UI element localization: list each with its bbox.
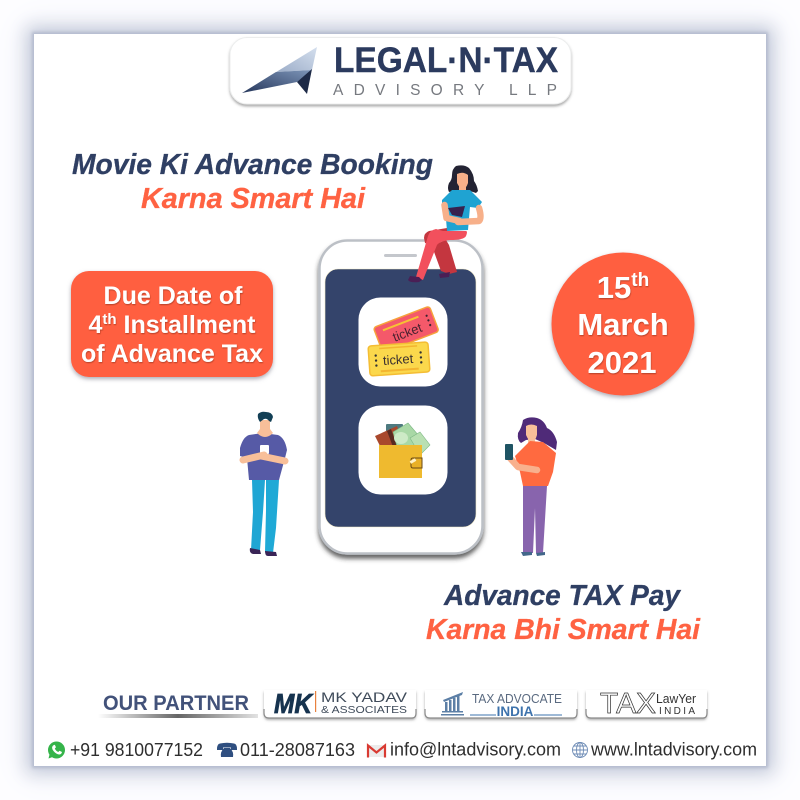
partner label: OUR PARTNER xyxy=(103,692,249,715)
heading: movie booking: Movie Ki Advance Booking xyxy=(72,149,433,181)
icon: globe xyxy=(572,742,588,758)
app card: wallet xyxy=(358,406,448,494)
icon: telephone xyxy=(217,743,237,757)
heading: movie booking: Karna Smart Hai xyxy=(141,183,366,215)
callout: due date: 4 xyxy=(88,311,102,339)
contact: website: www.lntadvisory.com xyxy=(590,740,757,760)
callout: date circle: 15 xyxy=(597,270,631,305)
logo subtitle: ADVISORY LLP xyxy=(333,82,557,99)
partner: MK Yadav xyxy=(264,688,416,719)
partner: Tax Advocate India: INDIA xyxy=(497,704,534,719)
partner: Tax Lawyer India: INDIA xyxy=(659,706,695,717)
icon: pillars xyxy=(441,692,464,716)
partner: Tax Lawyer India: LawYer xyxy=(656,691,697,706)
figure: seated woman on phone xyxy=(408,165,482,282)
partner: Tax Advocate India: TAX ADVOCATE xyxy=(472,691,562,706)
figure: standing man xyxy=(240,412,287,556)
partner: Tax Lawyer India: TAX xyxy=(600,688,656,720)
callout: due date: of Advance Tax xyxy=(81,340,263,368)
contact: telephone: 011-28087163 xyxy=(240,740,355,760)
callout: date circle: March xyxy=(577,307,669,342)
icon: paper plane logo mark xyxy=(242,47,317,94)
callout: date circle xyxy=(552,252,694,396)
partner: MK Yadav: MK YADAV xyxy=(321,690,407,705)
partner: MK Yadav: MK xyxy=(274,688,314,719)
contact: email: info@lntadvisory.com xyxy=(390,740,561,760)
heading: advance tax: Karna Bhi Smart Hai xyxy=(426,614,701,646)
phone speaker xyxy=(384,254,417,257)
partner: MK Yadav: & ASSOCIATES xyxy=(321,704,407,716)
logo card xyxy=(230,38,571,104)
icon: wallet with cards and cash xyxy=(375,423,430,478)
callout: due date xyxy=(71,271,273,377)
callout: date circle: th xyxy=(631,270,649,291)
icon: yellow ticket: ticket xyxy=(382,351,414,368)
app card: tickets xyxy=(358,298,448,386)
heading: movie booking xyxy=(72,149,433,215)
heading: advance tax xyxy=(426,580,701,646)
logo wordmark: LEGAL·N·TAX xyxy=(334,41,559,80)
partner: Tax Lawyer India xyxy=(586,688,707,720)
figure: standing woman xyxy=(505,417,557,556)
icon: mail xyxy=(367,745,386,758)
partner: Tax Advocate India xyxy=(425,690,577,719)
contact: whatsapp: +91 9810077152 xyxy=(70,740,203,760)
icon: red ticket: ticket xyxy=(390,320,424,345)
callout: due date: Installment xyxy=(117,311,256,339)
heading: advance tax: Advance TAX Pay xyxy=(443,580,682,612)
phone screen xyxy=(325,269,476,527)
callout: date circle: 2021 xyxy=(588,345,656,380)
phone xyxy=(320,240,482,554)
callout: due date: th xyxy=(102,311,117,328)
callout: due date: Due Date of xyxy=(104,282,243,310)
icon: whatsapp xyxy=(48,742,65,758)
